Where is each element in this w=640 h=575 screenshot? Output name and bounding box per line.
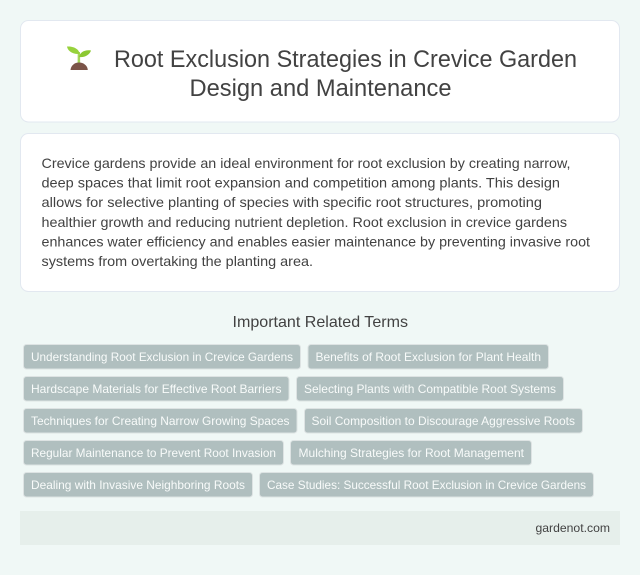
title: Design and Maintenance xyxy=(190,75,452,102)
tag xyxy=(290,440,532,465)
tags: related terms xyxy=(24,344,594,497)
tag xyxy=(24,344,300,369)
tag: Regular Maintenance to Prevent Root Invasion xyxy=(31,446,276,460)
tag: Techniques for Creating Narrow Growing Spaces xyxy=(31,414,290,428)
text block: description paragraph: healthier growth and reducing nutrient depletion. Root exclusion in crevice gardens xyxy=(42,214,567,230)
text block: description paragraph: deep spaces that limit root expansion and competition among plants. This design xyxy=(42,175,560,191)
tag: Understanding Root Exclusion in Crevice Gardens xyxy=(31,350,293,364)
tag: Case Studies: Successful Root Exclusion in Crevice Gardens xyxy=(267,478,586,492)
tag xyxy=(24,440,284,465)
tag: Mulching Strategies for Root Management xyxy=(298,446,525,460)
tag: Selecting Plants with Compatible Root Systems xyxy=(304,382,556,396)
tag: Benefits of Root Exclusion for Plant Health xyxy=(316,350,541,364)
icon: seedling xyxy=(67,46,91,70)
panel: description xyxy=(20,134,620,292)
footer: gardenot.com xyxy=(536,521,610,535)
tag xyxy=(24,472,252,497)
text block: description paragraph: enhances water efficiency and enables easier maintenance by preventing invasive root xyxy=(42,233,590,249)
tag xyxy=(260,472,594,497)
tag xyxy=(296,376,564,401)
text block: description paragraph: systems from overtaking the planting area. xyxy=(42,253,313,269)
text block: description paragraph: Crevice gardens provide an ideal environment for root exclusion by creating narrow, xyxy=(42,155,570,171)
heading: related terms: Important Related Terms xyxy=(232,314,408,331)
tag xyxy=(24,376,289,401)
tag: Hardscape Materials for Effective Root Barriers xyxy=(31,382,282,396)
tag xyxy=(24,408,297,433)
tag xyxy=(304,408,582,433)
text block: description paragraph: allows for selective planting of species with specific root structures, promoting xyxy=(42,194,542,210)
tag: Soil Composition to Discourage Aggressive Roots xyxy=(312,414,575,428)
panel: title card xyxy=(20,20,620,122)
tag xyxy=(308,344,548,369)
footer xyxy=(20,511,620,545)
title: Root Exclusion Strategies in Crevice Garden xyxy=(114,46,577,73)
text block: description paragraph xyxy=(42,155,590,269)
title xyxy=(114,46,577,102)
tag: Dealing with Invasive Neighboring Roots xyxy=(31,478,245,492)
